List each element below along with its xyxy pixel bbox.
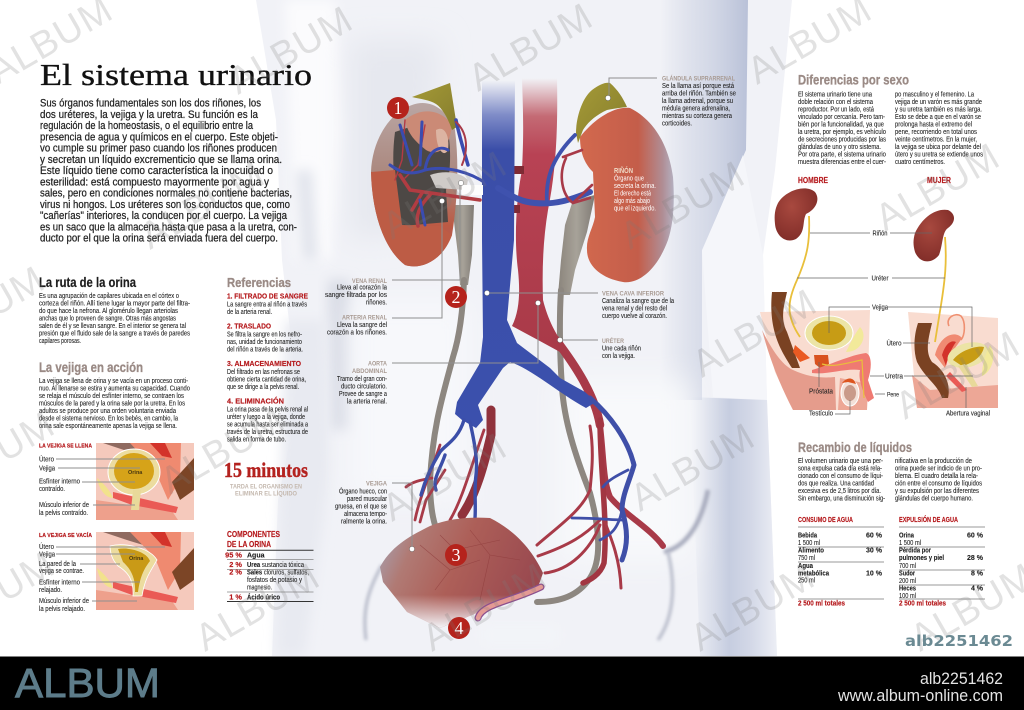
diagram: la vejiga se vacía: Orina: [129, 556, 144, 562]
testicle: [841, 380, 859, 406]
shared labels: riñón, uréter, vejiga, uretra: [872, 230, 903, 380]
panel: referencias: que se dirige a la pelvis renal.: [227, 384, 299, 391]
intro text block: Este líquido tiene como característica la inocuidad o: [40, 165, 273, 177]
renal artery: right: [562, 150, 592, 203]
label: glándula suprarrenal: [662, 74, 736, 128]
panel: recambio de líquidos: glándulas del cuerpo humano.: [895, 496, 973, 503]
diagram: mujer: Abertura vaginal: [946, 410, 990, 418]
label: riñón: [614, 166, 656, 212]
table: componentes de la orina: 2 %: [229, 560, 242, 569]
panel: la ruta de la orina: presión que el fluido sale de la sangre a través de paredes: [39, 330, 190, 337]
watermarks: ALBUM: [154, 398, 292, 503]
labels: la vejiga se vacía: Útero: [39, 542, 54, 551]
kidney: [775, 188, 817, 241]
label: aorta abdominal: ABDOMINAL: [352, 368, 387, 375]
label: vejiga: almacena tempo-: [344, 511, 388, 518]
table: expulsión de agua: [899, 515, 985, 608]
panel: diferencias por sexo: muestra diferencias entre el cuer-: [798, 159, 887, 166]
panel: diferencias por sexo: Esto se debe a que en el varón se: [895, 114, 981, 121]
table: consumo de agua: Alimento: [798, 548, 824, 554]
panel: diferencias por sexo: reproductor. Por un lado, está: [798, 106, 874, 114]
heading: hombre: HOMBRE: [798, 176, 829, 185]
footer bar: alb2251462: [920, 669, 1003, 688]
label: riñón: El derecho está: [614, 188, 651, 198]
table: expulsión de agua: Orina: [899, 532, 914, 540]
watermarks: ALBUM: [686, 281, 824, 386]
panel: referencias: Se filtra la sangre en los nefro-: [227, 332, 303, 338]
labels: la vejiga se llena: LA VEJIGA SE LLENA: [39, 444, 92, 450]
intro text block: virus ni hongos. Los uréteres son los conductos que, como: [40, 199, 290, 211]
watermarks: ALBUM: [376, 143, 514, 248]
label: riñón: algo más abajo: [614, 196, 650, 205]
diagram: la vejiga se llena: Orina: [128, 470, 143, 476]
leaders and labels: [888, 233, 973, 408]
vessels inside kidney: [400, 175, 480, 226]
intro text block: presencia de agua y químicos en el cuerpo. Este objeti-: [40, 131, 278, 143]
kidney cavity: [393, 116, 450, 226]
labels: la vejiga se llena: Músculo inferior de: [39, 502, 89, 509]
table: consumo de agua: 2 500 ml totales: [798, 598, 845, 608]
number badge 1: [387, 97, 409, 119]
label: glándula suprarrenal: arriba del riñón. También se: [662, 90, 736, 98]
panel: diferencias por sexo: bién por la funcionalidad, ya que: [798, 122, 884, 129]
ureter: right: [537, 195, 598, 602]
diagram: mujer: Útero: [886, 338, 902, 348]
callout: 15 minutos: TARDA EL ORGANISMO EN: [230, 484, 302, 490]
label: vejiga: pared muscular: [347, 496, 388, 503]
panel: recambio de líquidos: dos que realiza. Una cantidad: [798, 481, 874, 488]
table: expulsión de agua: EXPULSIÓN DE AGUA: [899, 515, 958, 524]
table: componentes de la orina: [225, 529, 314, 602]
table: consumo de agua: 60 %: [866, 532, 883, 540]
label: vejiga: [335, 480, 388, 526]
label: aorta abdominal: la arteria renal.: [347, 398, 387, 406]
panel: la vejiga en acción: adultos se produce por una orden voluntaria enviada: [39, 408, 176, 415]
intro text block: Sus órganos fundamentales son los dos riñones, los: [40, 98, 261, 110]
adrenal gland: right: [576, 83, 627, 143]
label: vena renal: Lleva al corazón la: [337, 284, 387, 292]
labels: la vejiga se vacía: Vejiga: [39, 552, 55, 558]
label: uréter: con la vejiga.: [602, 353, 635, 360]
intro text block: sales, pero en condiciones normales no contiene bacterias,: [40, 188, 292, 200]
table: componentes de la orina: 95 %: [225, 550, 242, 560]
watermarks: ALBUM: [624, 415, 762, 520]
shared labels: riñón, uréter, vejiga, uretra: Vejiga: [872, 304, 888, 312]
footer bar: [0, 656, 1024, 710]
panel: recambio de líquidos: blema. El cuadro detalla la rela-: [895, 473, 979, 480]
anatomy illustration: [371, 78, 674, 645]
label: arteria renal: [327, 314, 387, 336]
number badge 3: [445, 544, 467, 566]
panel: la vejiga en acción: nuo. Al llenarse se estira y aumenta su capacidad. Cuando: [39, 386, 190, 392]
table: expulsión de agua: 700 ml: [899, 563, 916, 570]
table: componentes de la orina: DE LA ORINA: [227, 539, 271, 549]
label: glándula suprarrenal: mientras su corteza genera: [662, 113, 732, 120]
label: arteria renal: corazón a los riñones.: [327, 330, 387, 336]
panel: diferencias por sexo: vejiga de un varón es más grande: [895, 99, 982, 106]
torso silhouette background: [256, 0, 792, 656]
panel: diferencias por sexo: la uretra, por ejemplo, es vehículo: [798, 129, 886, 136]
label: riñón: RIÑÓN: [614, 166, 633, 175]
panel: referencias: La orina pasa de la pelvis renal al: [227, 406, 308, 414]
label: glándula suprarrenal: médula genera adrenalina,: [662, 106, 730, 112]
panel: referencias: 2. TRASLADO: [227, 322, 271, 330]
panel: diferencias por sexo: prolonga hasta el extremo del: [895, 122, 972, 129]
label: uréter: URÉTER: [602, 336, 624, 345]
labels: la vejiga se vacía: la pelvis relajado.: [39, 606, 85, 613]
labels: la vejiga se vacía: [39, 531, 165, 613]
vein: right iliac branches: [590, 398, 634, 560]
panel: referencias: [227, 276, 308, 444]
table: expulsión de agua: 60 %: [967, 532, 984, 540]
panel: referencias: La sangre entra al riñón a través: [227, 302, 307, 308]
panel: recambio de líquidos: orina puede ser indicio de un pro-: [895, 466, 983, 472]
table: consumo de agua: [798, 515, 884, 608]
intro text block: regulación de la homeostasis, o el equilibrio entre la: [40, 120, 253, 132]
panel: diferencias por sexo: veinte centímetros. En la mujer,: [895, 137, 977, 144]
label: vejiga: gruesa, en el que se: [335, 504, 387, 510]
rectum: [914, 323, 949, 398]
footer bar: www.album-online.com: [837, 686, 1003, 705]
kidney: right: [498, 83, 674, 282]
panel: la ruta de la orina: do que hace la nefrona. Al glomérulo llegan arteriolas: [39, 308, 178, 315]
table: consumo de agua: 30 %: [866, 548, 883, 554]
panel: la vejiga en acción: se relaja el músculo del esfínter interno, se contraen los: [39, 393, 184, 400]
panel: referencias: nas, unidad de funcionamiento: [227, 339, 302, 346]
diagram: mujer: [886, 176, 998, 418]
heading: referencias: Referencias: [227, 276, 291, 290]
panel: diferencias por sexo: útero y su uretra se extiende unos: [895, 152, 983, 159]
label: aorta abdominal: [337, 360, 388, 406]
panel: la ruta de la orina: anchas que lo proveen de sangre. Otras más angostas: [39, 315, 176, 322]
panel: diferencias por sexo: vinculado por cercanía. Pero tam-: [798, 114, 886, 121]
labels: la vejiga se vacía: relajado.: [39, 587, 62, 594]
diagram: hombre: [760, 176, 899, 418]
label: glándula suprarrenal: la llama adrenal, porque su: [662, 98, 733, 105]
panel: recambio de líquidos: nificativa en la producción de: [895, 458, 972, 465]
label: glándula suprarrenal: Se la llama así porque está: [662, 83, 734, 90]
table: consumo de agua: 750 ml: [798, 555, 815, 562]
labels: la vejiga se llena: contraído.: [39, 486, 65, 493]
number badge 4: [448, 617, 470, 639]
panel: la ruta de la orina: salen de él y se llevan sangre. En el interior se genera tal: [39, 323, 186, 330]
labels: la vejiga se vacía: vejiga se contrae.: [39, 568, 84, 575]
panel: diferencias por sexo: pene, recorriendo en total unos: [895, 129, 977, 136]
table: expulsión de agua: 28 %: [967, 555, 984, 562]
panel: diferencias por sexo: po masculino y el femenino. La: [895, 92, 974, 98]
watermarks: ALBUM: [868, 135, 1007, 240]
table: componentes de la orina: Urea sustancia tóxica: [247, 562, 304, 569]
panel: la ruta de la orina: Es una agrupación de capilares ubicada en el córtex o: [39, 293, 179, 300]
label: vena cava inferior: cuerpo vuelve al corazón.: [602, 313, 667, 320]
table: componentes de la orina: 1 %: [229, 592, 242, 602]
label: arteria renal: Lleva la sangre del: [337, 322, 387, 329]
number badge 1: 1: [394, 98, 402, 118]
intro text block: "cañerías" interiores, la conducen por el cuerpo. La vejiga: [40, 210, 287, 222]
title: El sistema urinario: [40, 57, 312, 92]
heading: recambio de líquidos: Recambio de líquidos: [798, 439, 912, 455]
table: componentes de la orina: COMPONENTES: [227, 529, 280, 539]
table: expulsión de agua: Heces: [899, 586, 916, 592]
label: vena renal: VENA RENAL: [352, 278, 387, 285]
table: expulsión de agua: Sudor: [899, 570, 915, 578]
ureter: left: [430, 205, 474, 525]
labels: la vejiga se llena: Útero: [39, 454, 54, 464]
labels: la vejiga se vacía: La pared de la: [39, 561, 76, 568]
rectum: [771, 292, 800, 368]
table: expulsión de agua: 200 ml: [899, 578, 916, 585]
label: uréter: [602, 336, 641, 360]
labels: la vejiga se vacía: Músculo inferior de: [39, 598, 89, 605]
heading: diferencias por sexo: Diferencias por sexo: [798, 72, 909, 88]
label: uréter: Une cada riñón: [602, 346, 641, 352]
label: vena renal: sangre filtrada por los: [325, 292, 387, 299]
diagram: la vejiga se llena: [96, 443, 194, 520]
heading: la vejiga en acción: La vejiga en acción: [39, 359, 143, 375]
panel: diferencias por sexo: Por otra parte, el sistema urinario: [798, 152, 886, 159]
artery: left iliac: [462, 410, 491, 515]
label: riñón: que el izquierdo.: [614, 204, 656, 212]
shared labels: riñón, uréter, vejiga, uretra: Riñón: [872, 230, 888, 238]
watermarks: ALBUM: [684, 555, 822, 660]
table: consumo de agua: Agua: [798, 563, 813, 570]
callout: 15 minutos: [224, 458, 308, 498]
table: expulsión de agua: 4 %: [971, 586, 984, 592]
panel: la ruta de la orina: capilares porosas.: [39, 338, 81, 345]
heading: mujer: MUJER: [927, 176, 951, 185]
ureter: [935, 237, 946, 342]
panel: la vejiga en acción: músculos de la pared y la orina sale por la uretra. En los: [39, 401, 185, 408]
panel: diferencias por sexo: doble relación con el sistema: [798, 99, 873, 106]
shared labels: riñón, uréter, vejiga, uretra: Uretra: [885, 374, 903, 380]
diagram: la vejiga se vacía: [96, 532, 194, 610]
body fold: pale wedge: [702, 155, 767, 400]
intro text block: vo cumple su primer paso cuando los riñones producen: [40, 142, 277, 154]
panel: referencias: través de la uretra, estructura de: [227, 429, 308, 436]
number badge 2: [445, 286, 467, 308]
vena cava inferior: [455, 80, 596, 428]
intro text block: [40, 98, 297, 244]
watermarks: ALBUM: [134, 153, 272, 258]
label: aorta abdominal: Tramo del gran con-: [337, 376, 388, 383]
table: componentes de la orina: fosfatos de potasio y: [247, 577, 302, 584]
labels: la vejiga se llena: [39, 444, 165, 517]
adrenal gland: left: [412, 83, 457, 130]
table: consumo de agua: CONSUMO DE AGUA: [798, 515, 853, 524]
intro text block: es un saco que la almacena hasta que pasa a la uretra, con-: [40, 221, 297, 233]
panel: recambio de líquidos: El volumen urinario que una per-: [798, 458, 884, 465]
watermarks: ALBUM: [188, 555, 327, 660]
table: consumo de agua: 1 500 ml: [798, 540, 820, 547]
label: vena cava inferior: VENA CAVA INFERIOR: [602, 290, 664, 298]
table: componentes de la orina: Sales cloruros, sulfatos,: [247, 570, 309, 576]
panel: referencias: 1. FILTRADO DE SANGRE: [227, 292, 308, 300]
panel: recambio de líquidos: y su expulsión por las diferentes: [895, 488, 979, 495]
labels: la vejiga se llena: Esfínter interno: [39, 478, 80, 486]
table: consumo de agua: metabólica: [798, 570, 829, 578]
panel: diferencias por sexo: El sistema urinario tiene una: [798, 92, 872, 98]
watermarks: ALBUM: [416, 555, 554, 660]
panel: diferencias por sexo: la vejiga se ubica por delante del: [895, 144, 981, 151]
callout: 15 minutos: 15 minutos: [224, 458, 308, 482]
watermarks: ALBUM: [222, 0, 360, 103]
label: vejiga: ralmente la orina.: [341, 518, 387, 526]
panel: referencias: de la arteria renal.: [227, 309, 272, 316]
watermarks: ALBUM: [376, 425, 514, 530]
table: consumo de agua: 10 %: [866, 570, 883, 578]
labels: la vejiga se llena: la pelvis contraído.: [39, 510, 88, 517]
labels: la vejiga se vacía: LA VEJIGA SE VACÍA: [39, 531, 92, 539]
leaders and labels: [797, 233, 885, 414]
label: arteria renal: ARTERIA RENAL: [342, 314, 387, 322]
table: componentes de la orina: Agua: [247, 552, 265, 560]
ureter: [790, 216, 809, 337]
bladder: [380, 518, 560, 645]
urethra tube: [478, 587, 541, 618]
panel: diferencias por sexo: y su uretra también es más larga.: [895, 106, 982, 114]
table: expulsión de agua: Pérdida por: [899, 548, 931, 554]
label: vena renal: riñones.: [366, 300, 387, 306]
panel: referencias: Del filtrado en las nefronas se: [227, 369, 300, 376]
callout: 15 minutos: ELIMINAR EL LÍQUIDO: [235, 490, 297, 498]
panel: diferencias por sexo: [798, 72, 983, 166]
label: vena cava inferior: [602, 290, 674, 320]
panel: recambio de líquidos: ción entre el consumo de líquidos: [895, 481, 982, 488]
watermarks: ALBUM: [614, 153, 752, 258]
labels: la vejiga se vacía: Esfínter interno: [39, 580, 80, 586]
panel: la vejiga en acción: [39, 359, 190, 430]
panel: recambio de líquidos: sona expulsa cada día está rela-: [798, 466, 883, 472]
heading: la ruta de la orina: La ruta de la orina: [39, 275, 136, 290]
vein: left iliac branches: [421, 420, 477, 518]
panel: la vejiga en acción: desde el sistema nervioso. En los bebés, en cambio, la: [39, 416, 178, 423]
table: consumo de agua: 250 ml: [798, 578, 815, 584]
label: vena renal: [325, 278, 387, 306]
intro text block: ducto por el que la orina será enviada fuera del cuerpo.: [40, 232, 278, 244]
panel: referencias: 3. ALMACENAMIENTO: [227, 359, 301, 368]
label: aorta abdominal: Provee de sangre a: [339, 391, 387, 398]
panel: la vejiga en acción: orina sale espontáneamente apenas la vejiga se llena.: [39, 423, 177, 430]
footer bar: ALBUM: [15, 660, 160, 706]
label: vejiga: VEJIGA: [366, 480, 387, 488]
table: componentes de la orina: Ácido úrico: [247, 592, 280, 602]
table: expulsión de agua: 8 %: [971, 570, 984, 578]
panel: recambio de líquidos: [798, 439, 983, 503]
table: expulsión de agua: pulmones y piel: [899, 555, 944, 562]
panel: la ruta de la orina: [39, 275, 191, 345]
label: riñón: secreta la orina.: [614, 181, 656, 190]
panel: referencias: uréter y luego a la vejiga, donde: [227, 414, 305, 421]
uterus and bladder: [935, 334, 962, 368]
panel: diferencias por sexo: cuatro centímetros.: [895, 159, 945, 166]
number badge 3: 3: [452, 545, 460, 565]
penis: [812, 353, 874, 402]
intro text block: y secretan un líquido excrementicio que se llama orina.: [40, 154, 282, 166]
table: expulsión de agua: 1 500 ml: [899, 540, 921, 547]
label: vena cava inferior: vena renal y del resto del: [602, 306, 667, 312]
shared labels: riñón, uréter, vejiga, uretra: Uréter: [872, 276, 889, 282]
bladder and prostate: [805, 316, 853, 350]
diagram: hombre: Próstata: [809, 388, 833, 396]
number badge 4: 4: [454, 618, 464, 638]
panel: referencias: obtiene cierta cantidad de orina,: [227, 376, 306, 384]
panel: recambio de líquidos: excesiva es de 2,5 litros por día.: [798, 488, 881, 495]
label: glándula suprarrenal: GLÁNDULA SUPRARRENAL: [662, 74, 735, 82]
kidney: left (cut open): [371, 83, 487, 266]
panel: diferencias por sexo: de secreciones producidas por las: [798, 137, 886, 144]
panel: la vejiga en acción: La vejiga se llena de orina y se vacía en un proceso conti-: [39, 378, 189, 385]
intro text block: dos uréteres, la vejiga y la uretra. Su función es la: [40, 109, 258, 121]
panel: la ruta de la orina: corteza del riñón. Allí tiene lugar la mayor parte del filtra-: [39, 300, 191, 308]
label: riñón: Órgano que: [614, 174, 644, 182]
number badge 2: 2: [452, 287, 460, 307]
panel: referencias: 4. ELIMINACIÓN: [227, 396, 284, 406]
panel: referencias: salida en forma de tubo.: [227, 436, 286, 444]
watermarks: ALBUM: [888, 323, 1024, 428]
callouts: leader lines: [392, 78, 657, 552]
kidney: [914, 210, 954, 261]
panel: recambio de líquidos: Sin embargo, una disminución sig-: [798, 496, 886, 503]
label: aorta abdominal: AORTA: [368, 360, 387, 368]
panel: referencias: del riñón a través de la arteria.: [227, 346, 303, 354]
label: vena cava inferior: Canaliza la sangre que de la: [602, 298, 674, 305]
table: componentes de la orina: magnesio.: [247, 584, 272, 592]
aorta: [512, 78, 566, 352]
diagram: hombre: Pene: [887, 392, 899, 398]
panel: referencias: se acumula hasta ser eliminada a: [227, 422, 308, 428]
label: glándula suprarrenal: corticoides.: [662, 120, 692, 128]
table: expulsión de agua: 2 500 ml totales: [899, 598, 946, 608]
intro text block: esterilidad: está compuesto mayormente por agua y: [40, 176, 270, 188]
label: aorta abdominal: ducto circulatorio.: [341, 384, 387, 390]
table: consumo de agua: Bebida: [798, 532, 817, 540]
table: expulsión de agua: 100 ml: [899, 593, 916, 600]
renal vein: right: [498, 188, 590, 203]
diagram: hombre: Testículo: [809, 410, 833, 418]
stock id mark: alb2251462: [905, 632, 1013, 650]
table: componentes de la orina: 2 %: [229, 568, 242, 576]
label: vejiga: Órgano hueco, con: [339, 486, 387, 496]
labels: la vejiga se llena: Vejiga: [39, 466, 55, 472]
panel: diferencias por sexo: glándulas de uno y otro sistema.: [798, 144, 881, 151]
artery: right iliac: [556, 340, 600, 425]
panel: recambio de líquidos: cionado con el consumo de líqui-: [798, 473, 884, 480]
